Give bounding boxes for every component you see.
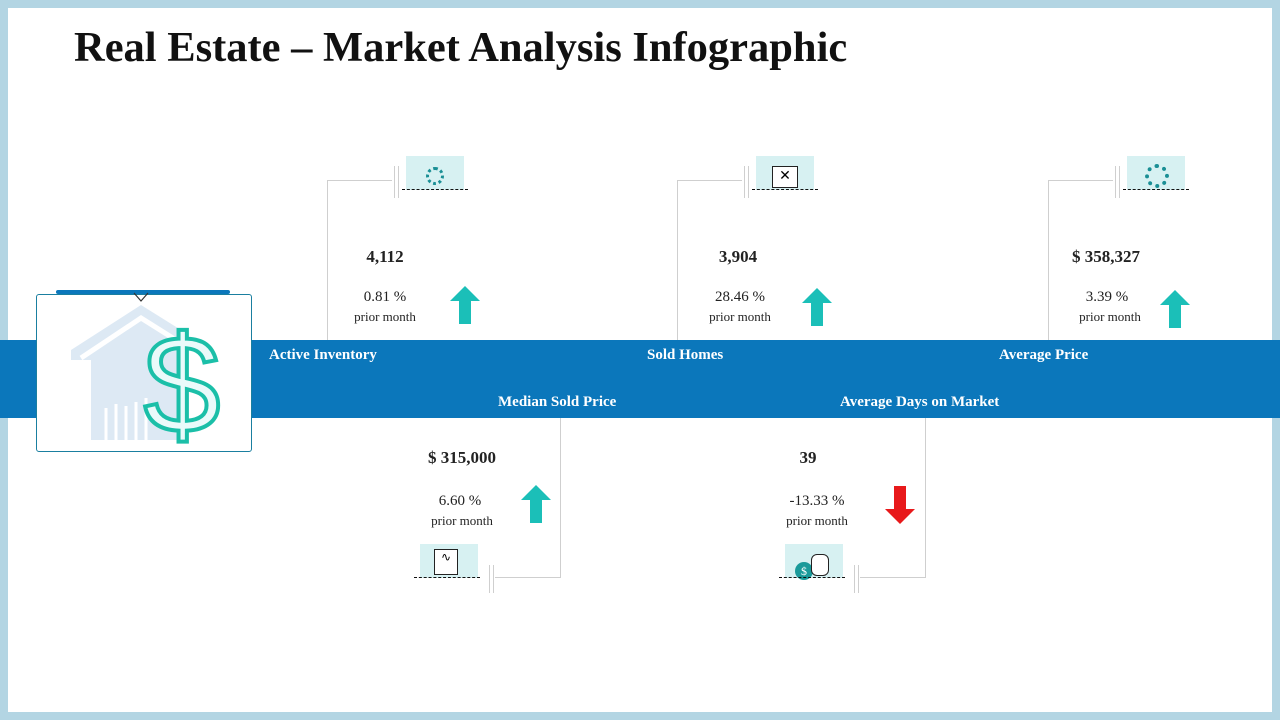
- text: prior month: [431, 513, 493, 528]
- item: active inventory: [327, 156, 468, 340]
- icon: tools: [756, 156, 814, 190]
- icon: coins: $: [801, 564, 807, 578]
- label: average days on market: Average Days on Market: [840, 394, 999, 410]
- value: 4,112: 4,112: [366, 247, 404, 266]
- label: sold homes: Sold Homes: [647, 347, 723, 363]
- arrow up: [802, 288, 832, 326]
- icon: document: ∿: [441, 550, 451, 564]
- left card: [36, 290, 252, 452]
- text: 3.39 %: [1086, 289, 1128, 305]
- text: $ 358,327: [1072, 247, 1140, 266]
- text: 3,904: [719, 247, 757, 266]
- icon: tools: ✕: [779, 169, 791, 184]
- icon: coins: [785, 544, 843, 578]
- title: Real Estate – Market Analysis Infographic: [74, 24, 847, 71]
- blue band: [0, 340, 1280, 418]
- label: average price: Average Price: [999, 347, 1088, 363]
- text: 6.60 %: [439, 493, 481, 509]
- item: average price: [1048, 156, 1189, 340]
- arrow up: [450, 286, 480, 324]
- item: average days on market: [779, 418, 926, 593]
- text: prior month: [1079, 309, 1141, 324]
- label: active inventory: Active Inventory: [269, 347, 377, 363]
- text: prior month: [354, 309, 416, 324]
- text: -13.33 %: [790, 493, 844, 509]
- arrow up: [521, 485, 551, 523]
- icon: gear: [406, 156, 464, 190]
- icon: document: [420, 544, 478, 578]
- text: 0.81 %: [364, 289, 406, 305]
- text: prior month: [786, 513, 848, 528]
- text: 39: [800, 448, 816, 467]
- text: $ 315,000: [428, 448, 496, 467]
- arrow up: [1160, 290, 1190, 328]
- icon: gear: [1127, 156, 1185, 190]
- label: median sold price: Median Sold Price: [498, 394, 616, 410]
- text: 28.46 %: [715, 289, 765, 305]
- icon: house: [71, 305, 181, 440]
- arrow down: [885, 486, 915, 524]
- text: prior month: [709, 309, 771, 324]
